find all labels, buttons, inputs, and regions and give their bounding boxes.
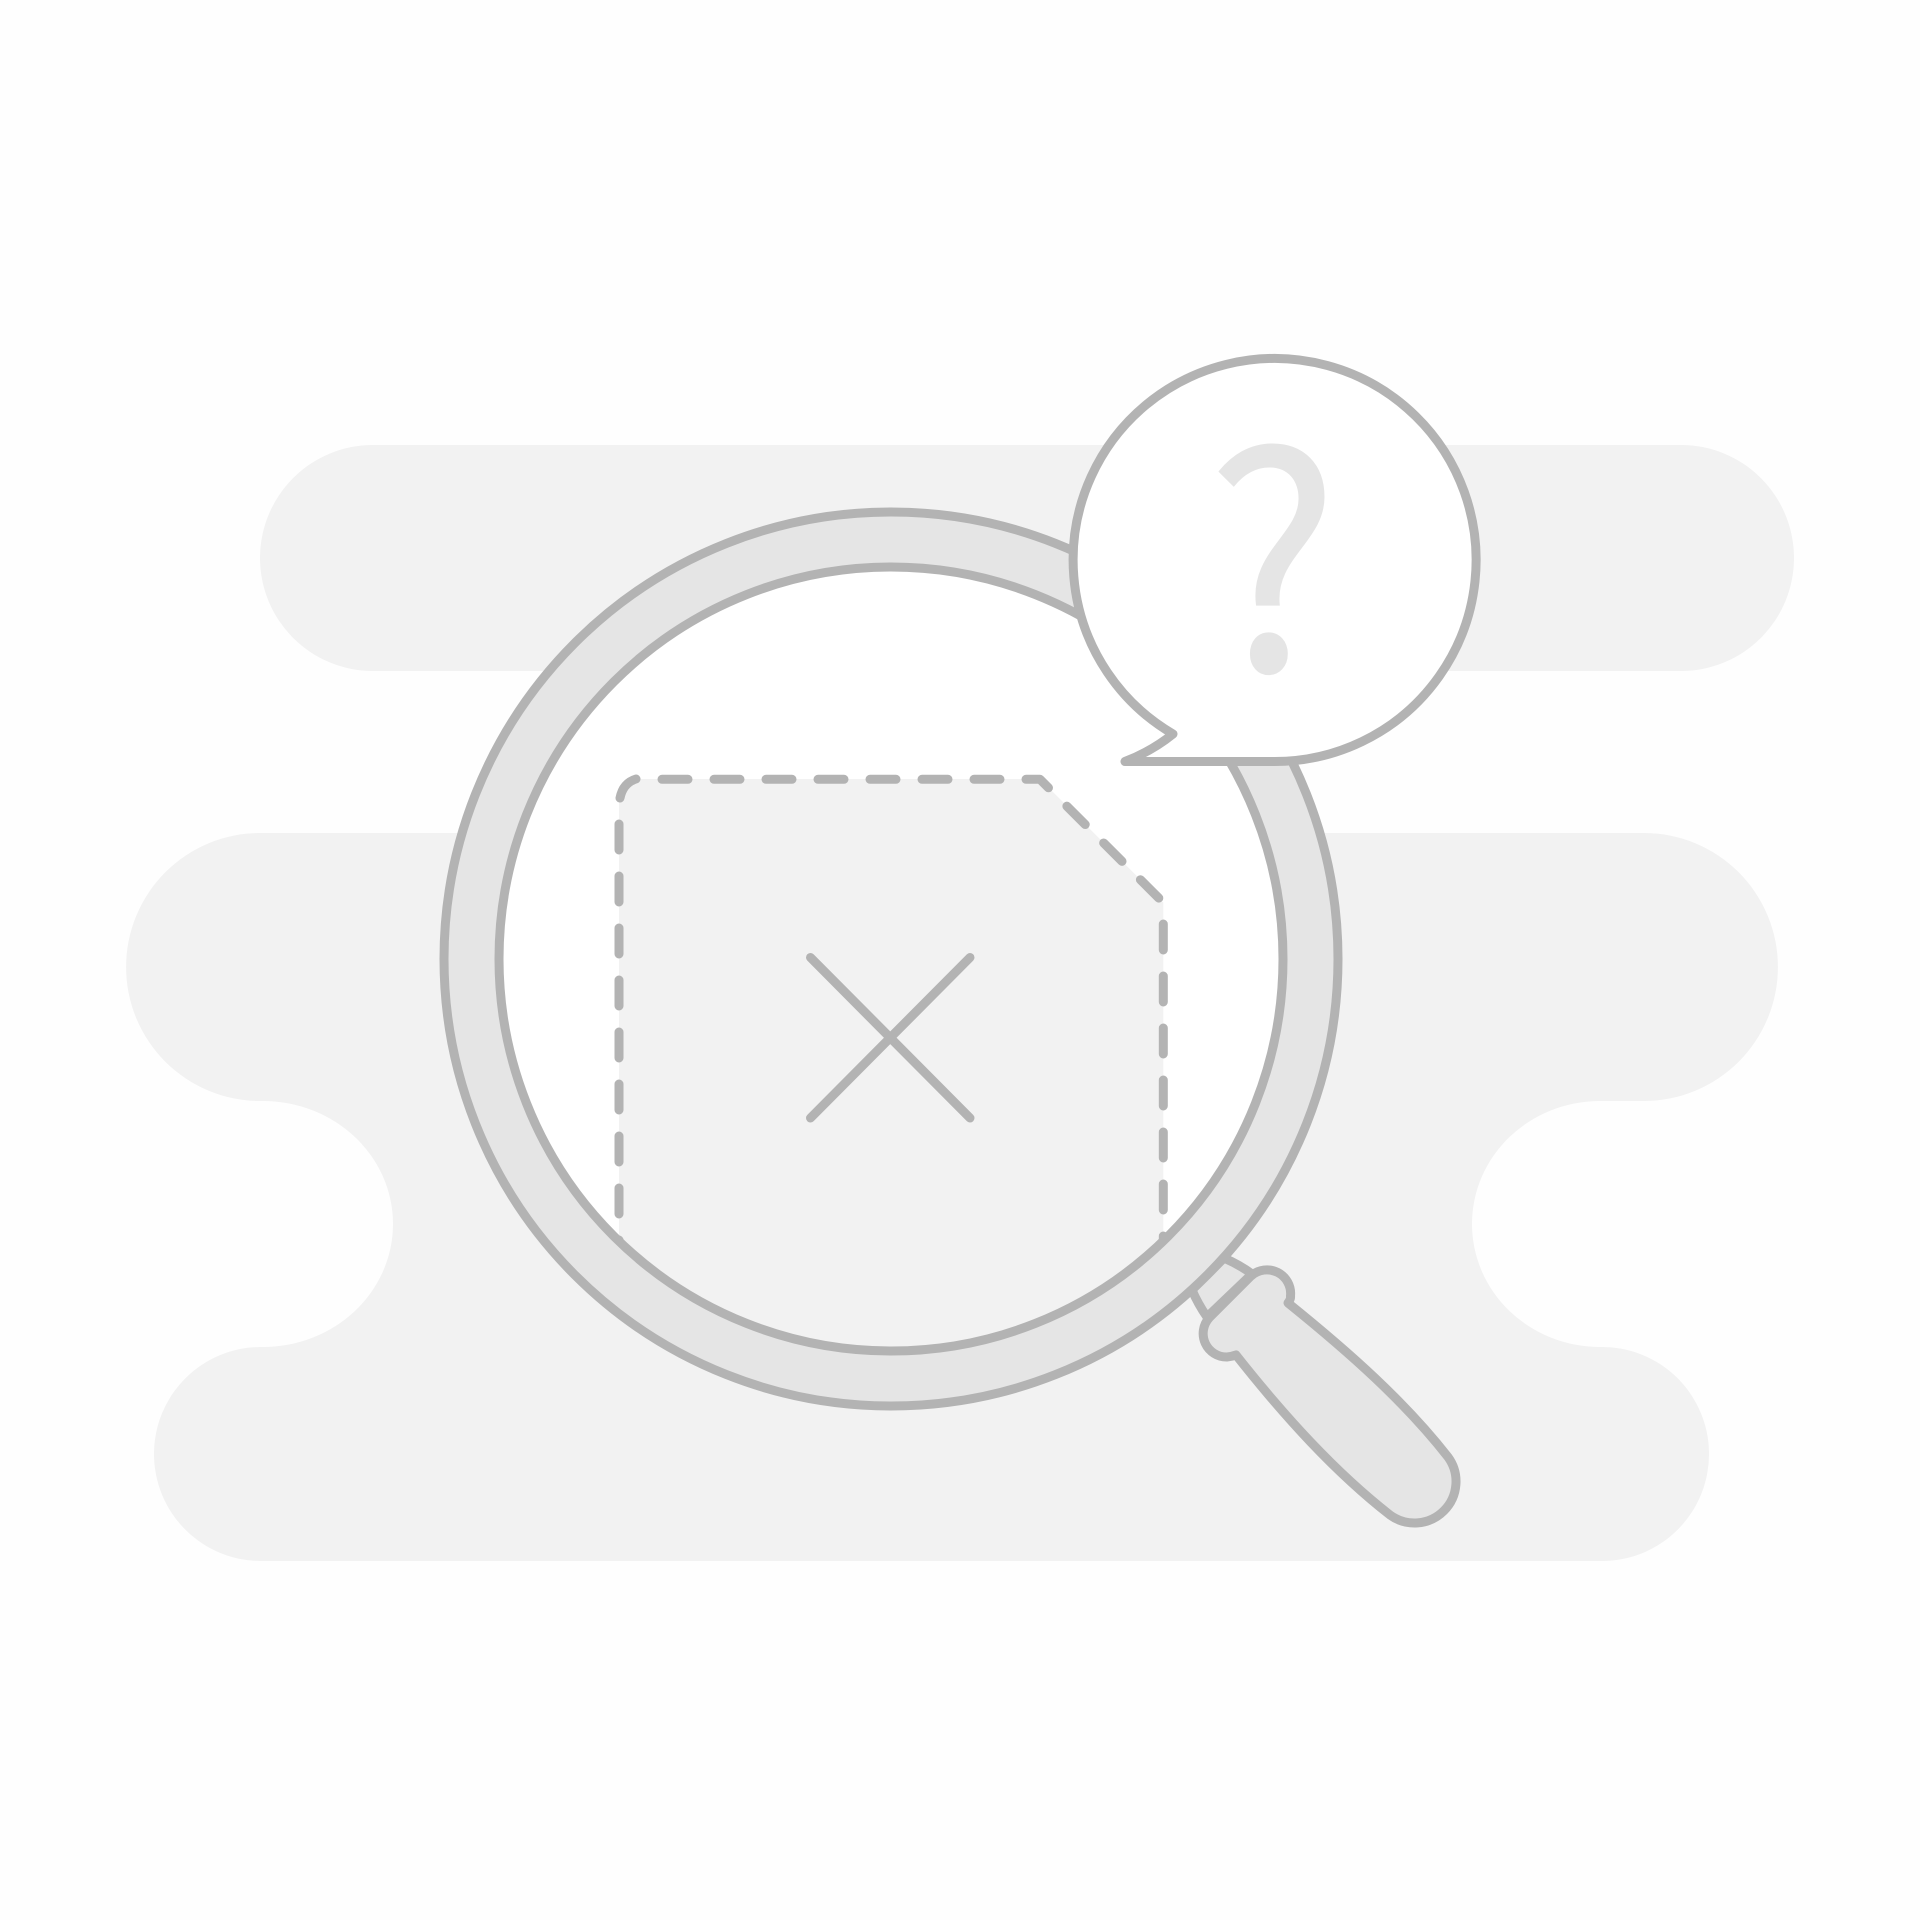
dashed top and diagonal edge (662, 779, 1163, 903)
handle (1203, 1270, 1456, 1523)
handle neck (1192, 1258, 1252, 1317)
top background pill (260, 445, 1794, 671)
lens rim (499, 567, 1283, 1351)
document fill (619, 779, 1163, 1400)
cross stroke one (810, 958, 970, 1118)
dashed left edge (614, 820, 624, 1240)
lens glass (499, 567, 1283, 1351)
cross mark (810, 958, 970, 1118)
cross stroke two (810, 958, 970, 1118)
speech bubble (1073, 326, 1476, 762)
dashed corner (620, 779, 636, 798)
document dashed outline (614, 774, 1168, 1240)
lens ring (444, 512, 1338, 1406)
question mark: ? (1208, 326, 1338, 756)
illustration: search with no result (126, 354, 1794, 1561)
background blobs (126, 445, 1794, 1561)
bubble outline (1073, 359, 1476, 762)
missing document placeholder (619, 779, 1163, 1400)
dashed right edge (1158, 920, 1168, 1239)
magnifying glass (444, 512, 1456, 1523)
lower background blob (126, 833, 1778, 1561)
